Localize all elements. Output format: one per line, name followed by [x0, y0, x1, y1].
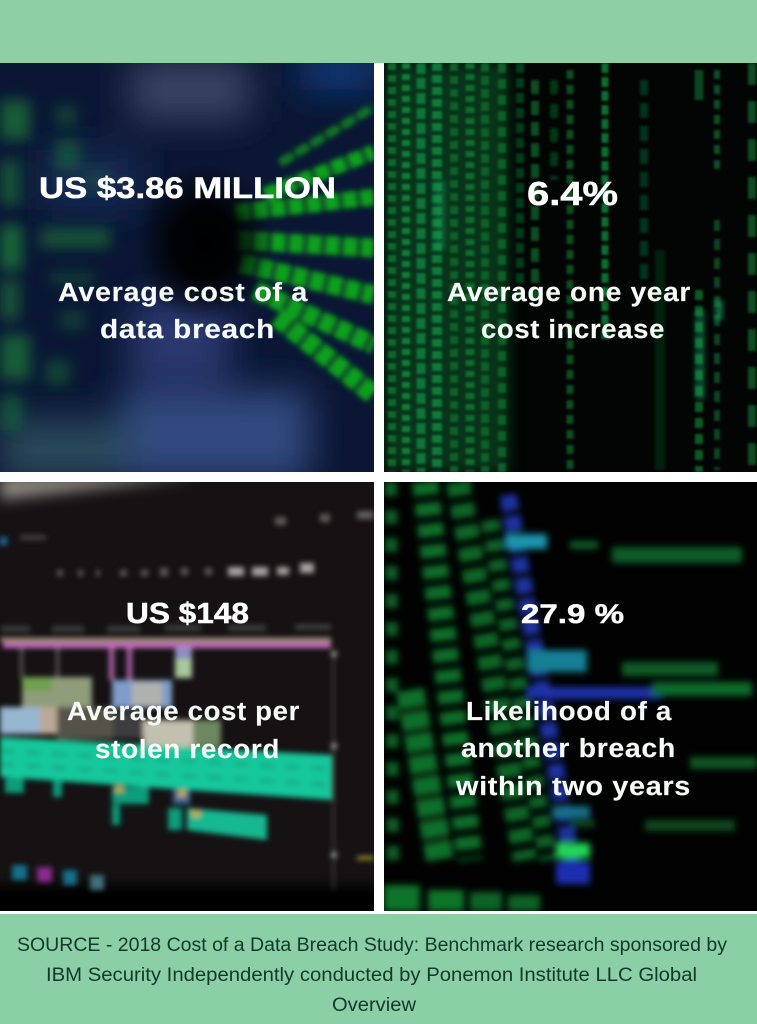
footer background [0, 914, 757, 1024]
description: average cost of a data breach: Average cost of a [58, 279, 308, 307]
panel: likelihood of another breach [384, 482, 757, 911]
headline: US $148: US $148 [126, 598, 249, 630]
background image: blurred green data tunnel [0, 63, 374, 472]
panel: average one year cost increase [384, 63, 757, 472]
description: average one year cost increase [447, 279, 691, 344]
description: average cost per stolen record: Average cost per [67, 698, 300, 726]
background image: green matrix code columns [384, 63, 757, 472]
description: likelihood of another breach within two years: within two years [455, 773, 691, 801]
source text: SOURCE - 2018 Cost of a Data Breach Study: Benchmark research sponsored by [17, 935, 728, 956]
description: average one year cost increase: Average one year [447, 279, 691, 307]
background image: blurred green and blue source code [384, 482, 757, 911]
description: average cost per stolen record [67, 698, 300, 764]
background image: blurred video timeline on a monitor [0, 482, 374, 911]
top green band [0, 0, 757, 63]
description: likelihood of another breach within two years: Likelihood of a [466, 698, 672, 726]
panel: average cost of a data breach [0, 50, 380, 480]
panel: average cost per stolen record [0, 476, 394, 925]
headline: 6.4%: 6.4% [527, 175, 618, 212]
source text: Overview [332, 995, 416, 1016]
description: average cost per stolen record: stolen record [95, 736, 280, 764]
description: average cost of a data breach [58, 279, 308, 344]
source text [17, 935, 728, 1016]
headline: US $3.86 million: US $3.86 MILLION [39, 172, 336, 205]
description: average cost of a data breach: data breach [100, 316, 275, 344]
footer: source citation [0, 914, 757, 1024]
headline: 27.9 %: 27.9 % [521, 599, 624, 629]
description: average one year cost increase: cost increase [481, 316, 665, 344]
description: likelihood of another breach within two years: another breach [461, 735, 676, 763]
description: likelihood of another breach within two years [455, 698, 691, 801]
source text: IBM Security Independently conducted by Ponemon Institute LLC Global [46, 965, 697, 986]
